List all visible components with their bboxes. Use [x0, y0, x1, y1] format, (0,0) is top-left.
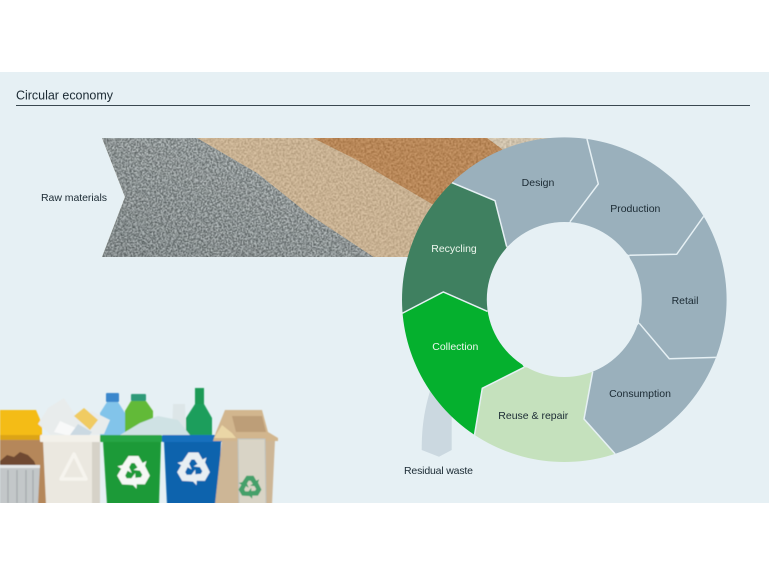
- tan bin: [213, 410, 278, 504]
- segment: consumption: [584, 323, 716, 454]
- label: retail: Retail: [672, 295, 698, 307]
- photo: raw materials arrow: [102, 138, 562, 258]
- title: Circular economy: [16, 88, 114, 102]
- segment: collection: [402, 292, 524, 435]
- icon: recycling symbol on cup: [238, 475, 262, 499]
- segment: design: [452, 137, 598, 246]
- yellow bin with tin can: [0, 410, 46, 504]
- arrow: residual waste: [422, 388, 452, 457]
- light green bottle: [125, 394, 153, 436]
- clear plastic cup: [236, 439, 266, 504]
- icon: recycling symbol on green bin: [116, 455, 151, 490]
- segment: recycling: [402, 182, 507, 313]
- dark green bottle: [186, 388, 212, 436]
- label: collection: Collection: [432, 341, 479, 353]
- blue bin: [162, 435, 222, 504]
- label: consumption: Consumption: [609, 388, 671, 400]
- label: production: Production: [610, 203, 661, 215]
- icon: recycling symbol on blue bin: [176, 452, 211, 486]
- green bin: [100, 435, 162, 504]
- segment: production: [570, 139, 704, 256]
- label: reuse and repair: Reuse & repair: [498, 410, 569, 422]
- label: residual waste: Residual waste: [404, 465, 473, 477]
- clear glass: [173, 404, 187, 430]
- background panel: [0, 72, 769, 503]
- label: recycling: Recycling: [431, 243, 477, 255]
- photo: recycling bins: [0, 388, 278, 504]
- circular diagram: [402, 137, 727, 462]
- segment: retail: [629, 217, 727, 358]
- crumpled plastic and paper: [37, 408, 191, 436]
- blue plastic bottle: [100, 393, 125, 436]
- white bin: [40, 435, 102, 504]
- segment: reuse and repair: [475, 367, 614, 462]
- label: raw materials: Raw materials: [41, 192, 107, 204]
- label: design: Design: [522, 177, 555, 189]
